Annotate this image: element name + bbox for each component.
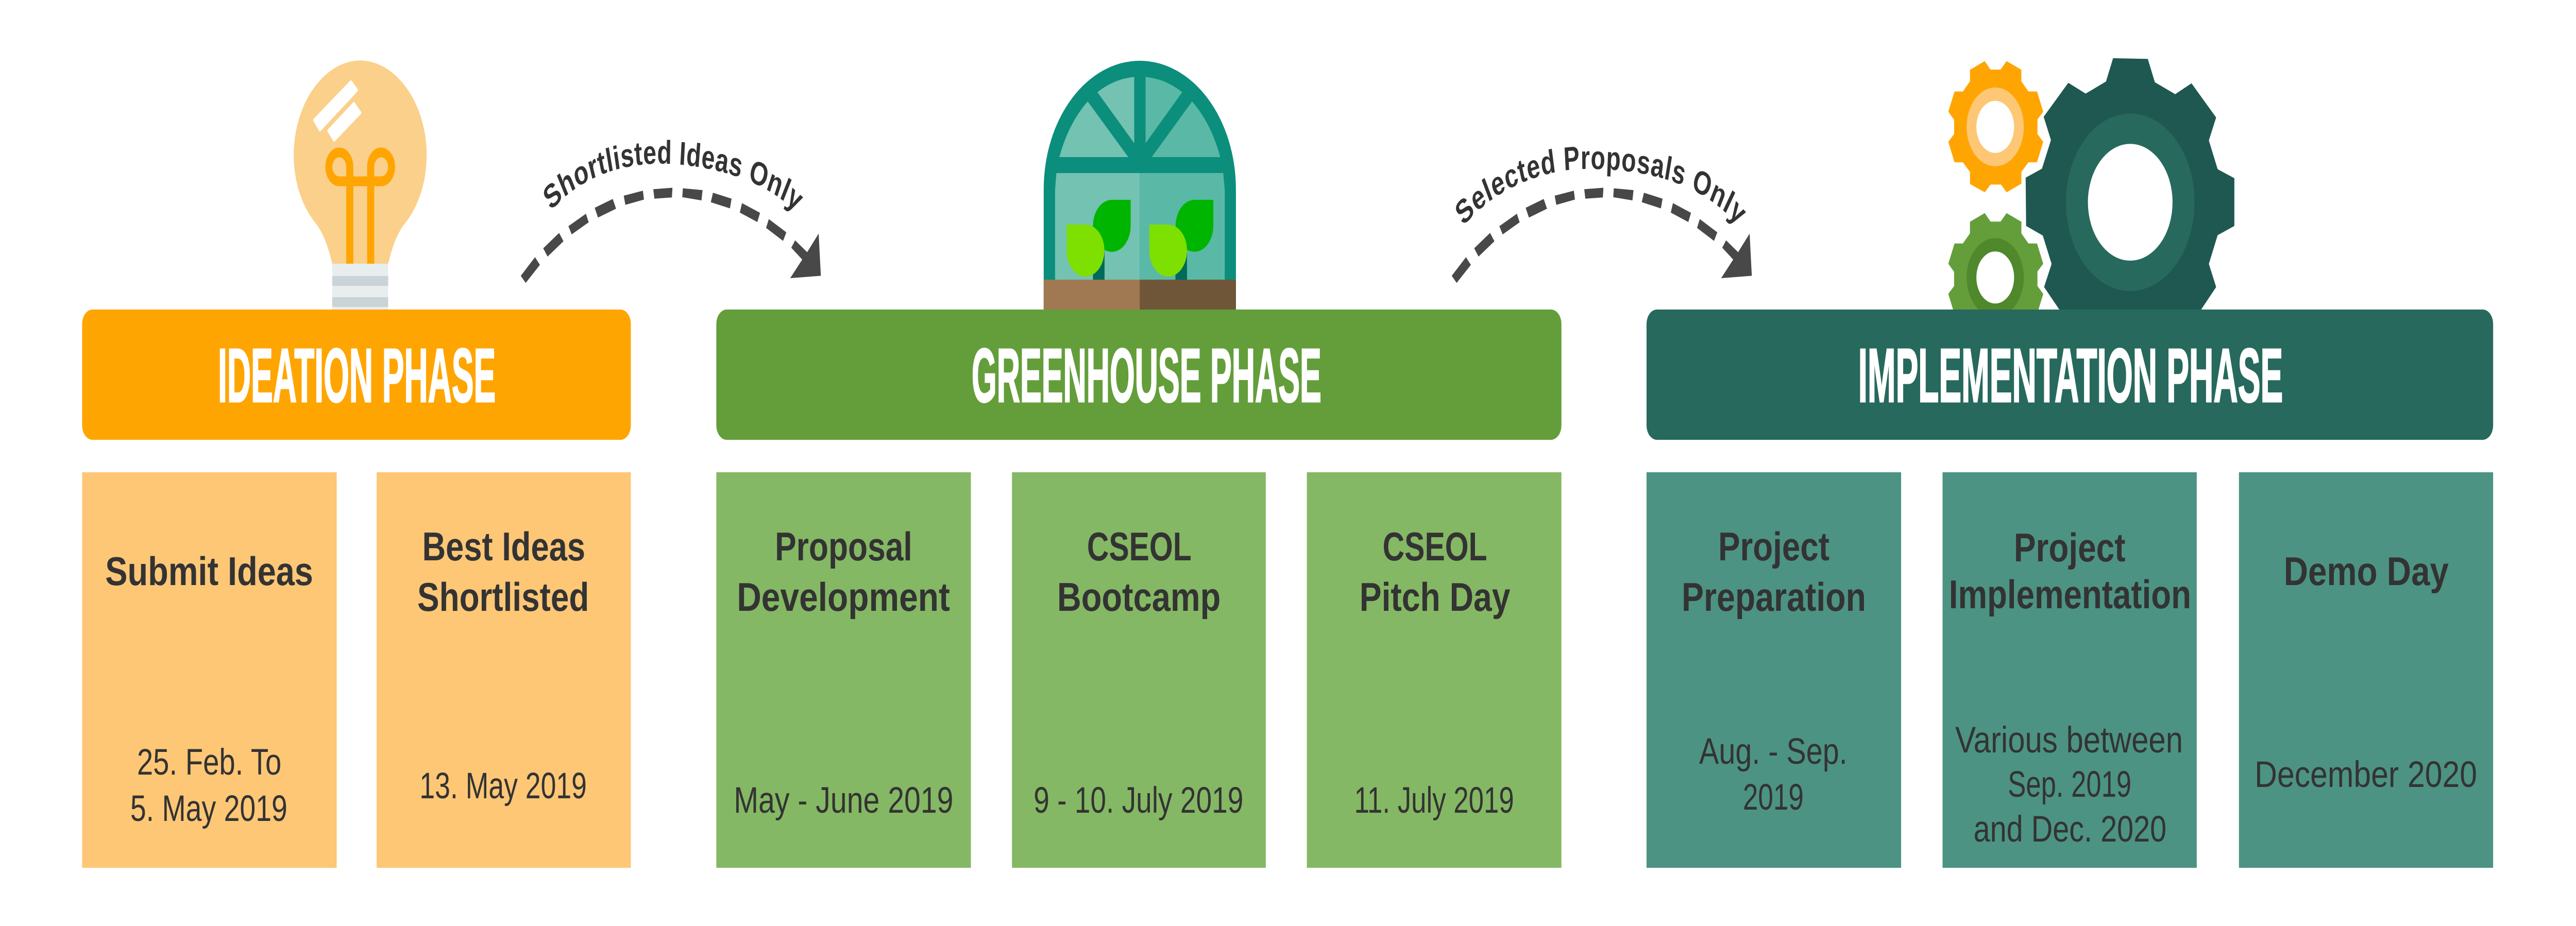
card: project implementation: Project xyxy=(2014,525,2125,570)
arrow: shortlisted ideas only xyxy=(520,140,821,283)
card: project preparation: 2019 xyxy=(1743,777,1804,818)
card: cseol pitch day xyxy=(1307,472,1562,868)
card: cseol pitch day: CSEOL xyxy=(1383,524,1487,569)
card: cseol bootcamp xyxy=(1012,472,1266,868)
arrow: shortlisted ideas only: Shortlisted Ideas Only xyxy=(544,140,803,211)
card: proposal development: Proposal xyxy=(775,524,912,569)
card: project preparation: Aug. - Sep. xyxy=(1699,731,1848,772)
icon: greenhouse xyxy=(1044,61,1236,310)
card: demo day: Demo Day xyxy=(2284,549,2449,594)
card: proposal development: May - June 2019 xyxy=(734,780,953,821)
card: project implementation: Implementation xyxy=(1949,572,2191,617)
icon: light bulb xyxy=(294,61,427,311)
header: ideation phase: IDEATION PHASE xyxy=(218,333,496,418)
card: proposal development: Development xyxy=(737,575,950,620)
card: submit ideas: Submit Ideas xyxy=(105,549,313,594)
icon: orange gear xyxy=(1948,61,2043,192)
icon: large dark gear xyxy=(2026,58,2234,312)
card: proposal development xyxy=(716,472,971,868)
card: cseol pitch day: 11. July 2019 xyxy=(1354,780,1514,821)
card: submit ideas: 25. Feb. To xyxy=(137,742,281,783)
header: greenhouse phase xyxy=(716,310,1562,440)
card: cseol pitch day: Pitch Day xyxy=(1360,575,1511,620)
header: ideation phase xyxy=(82,310,631,440)
card: cseol bootcamp: CSEOL xyxy=(1087,524,1192,569)
card: submit ideas xyxy=(82,472,337,868)
arrow: selected proposals only: Selected Proposals Only xyxy=(1456,147,1746,224)
card: project implementation: Various between xyxy=(1955,720,2183,761)
card: best ideas shortlisted: 13. May 2019 xyxy=(419,766,587,807)
header: implementation phase xyxy=(1647,310,2493,440)
card: best ideas shortlisted: Best Ideas xyxy=(422,524,585,569)
card: project implementation xyxy=(1942,472,2197,868)
arrow: selected proposals only xyxy=(1452,147,1752,283)
card: project preparation xyxy=(1647,472,1901,868)
card: demo day: December 2020 xyxy=(2255,754,2477,795)
card: demo day xyxy=(2239,472,2493,868)
icon: green gear xyxy=(1948,213,2043,345)
card: project implementation: and Dec. 2020 xyxy=(1974,809,2166,850)
card: submit ideas: 5. May 2019 xyxy=(130,788,287,829)
card: best ideas shortlisted: Shortlisted xyxy=(417,575,589,620)
card: cseol bootcamp: Bootcamp xyxy=(1057,575,1221,620)
header: greenhouse phase: GREENHOUSE PHASE xyxy=(972,333,1321,418)
icon: gears xyxy=(1948,58,2234,345)
card: project implementation: Sep. 2019 xyxy=(2008,764,2131,805)
card: cseol bootcamp: 9 - 10. July 2019 xyxy=(1033,780,1243,821)
card: best ideas shortlisted xyxy=(377,472,631,868)
header: implementation phase: IMPLEMENTATION PHASE xyxy=(1858,333,2283,418)
card: project preparation: Project xyxy=(1718,524,1829,569)
card: project preparation: Preparation xyxy=(1682,575,1866,620)
